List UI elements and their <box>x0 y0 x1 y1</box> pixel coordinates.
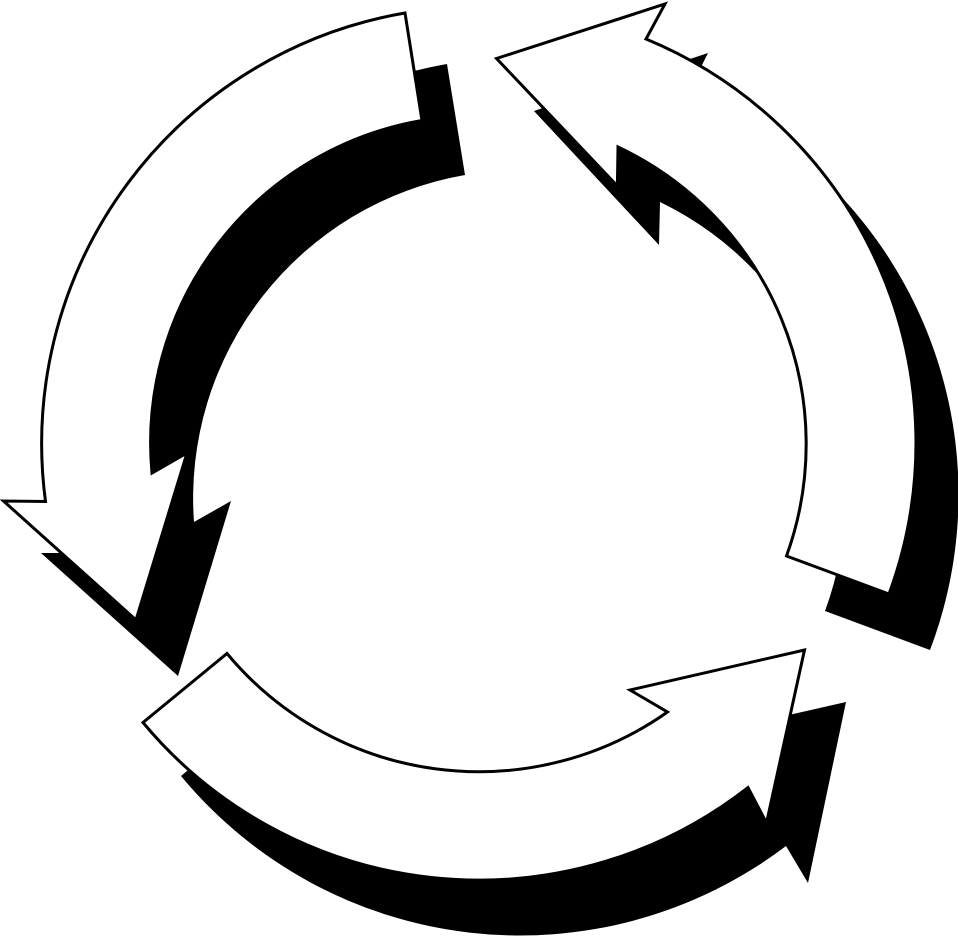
arrow: bottom, pointing up-right <box>143 650 846 936</box>
arrow: left, pointing down <box>4 13 465 676</box>
arrow body: bottom arrow <box>143 650 804 880</box>
shadow: bottom arrow <box>181 702 846 936</box>
shadow: right arrow <box>534 53 958 650</box>
shadow: left arrow <box>41 64 465 676</box>
arrow body: right arrow <box>496 4 916 594</box>
arrow body: left arrow <box>4 13 422 620</box>
arrow: right, pointing up-left <box>496 4 958 650</box>
